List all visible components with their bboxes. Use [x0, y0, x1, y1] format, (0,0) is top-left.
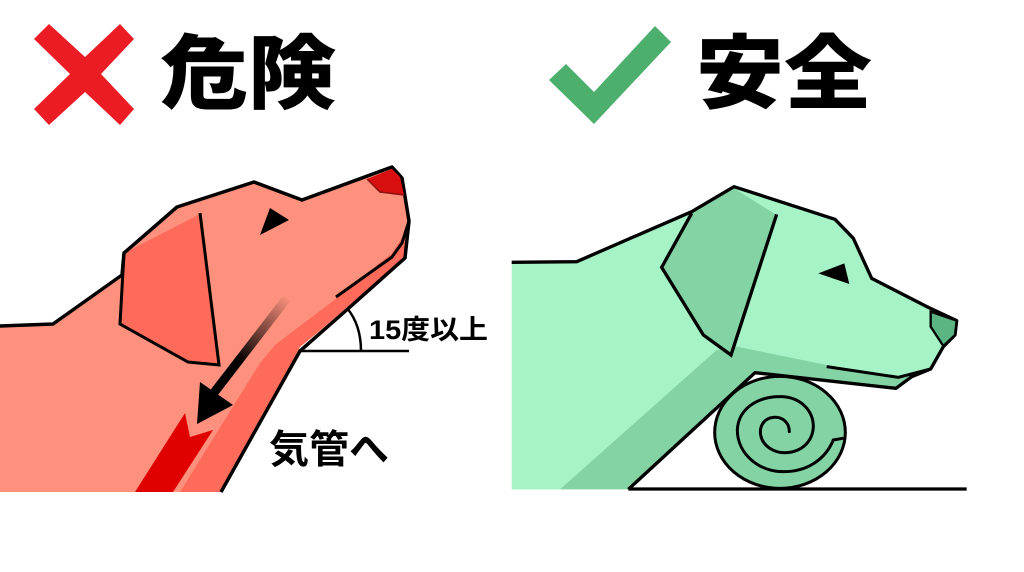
ear: [662, 188, 777, 355]
icon: red cross: [34, 24, 134, 125]
nose: [367, 169, 404, 195]
panel: dangerous head-up posture: [0, 167, 488, 492]
eye: [260, 208, 289, 235]
heading: danger: 危険: [160, 9, 336, 126]
outline: [512, 187, 957, 489]
ear: [120, 213, 219, 365]
arrow: direction to trachea: [197, 298, 287, 424]
ground line: [628, 484, 967, 494]
dog body: red: [0, 167, 409, 492]
angle marker: [300, 308, 409, 351]
label: angle: 15度以上: [369, 315, 488, 345]
neck shading: [560, 347, 912, 489]
jaw line: [336, 221, 409, 297]
trachea arrow: red: [135, 413, 213, 492]
outline: [0, 167, 409, 492]
nose: [931, 312, 957, 346]
throat shading: [180, 233, 405, 492]
jaw line: [827, 367, 931, 377]
panel: safe posture with rolled towel: [512, 187, 967, 489]
icon: green check: [549, 26, 671, 124]
rolled towel: [715, 376, 845, 488]
dog body: green: [512, 187, 957, 489]
nose outline: [367, 179, 404, 195]
eye: [818, 263, 849, 284]
heading: safe: 安全: [696, 9, 872, 126]
label: into trachea: 気管へ: [269, 429, 389, 472]
